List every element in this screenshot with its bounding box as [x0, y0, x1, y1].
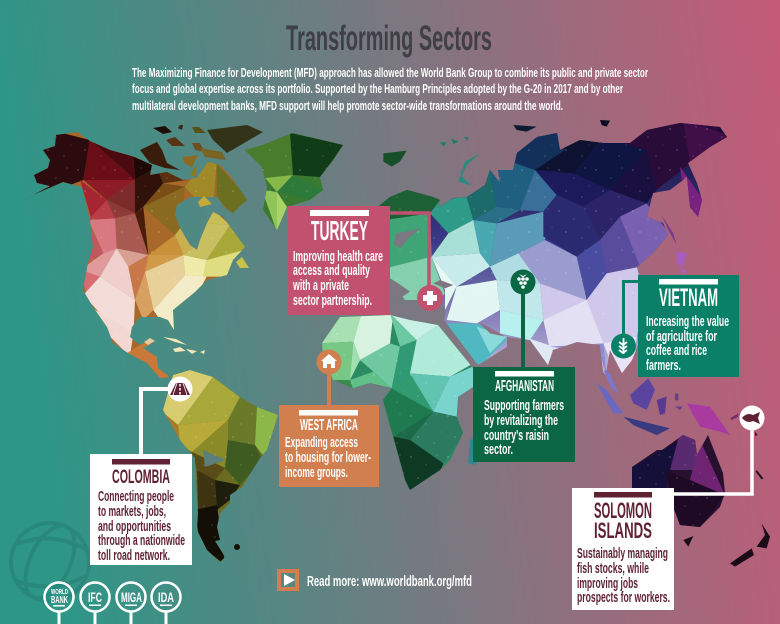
read more link [279, 571, 472, 590]
callout: solomon islands: fish stocks, while [577, 561, 649, 577]
icon: wheat [611, 334, 636, 358]
callout: solomon islands: prospects for workers. [577, 590, 670, 606]
callout: vietnam: of agriculture for [646, 329, 717, 345]
map: northern islands [383, 120, 687, 275]
logo: ida: IDA [158, 589, 174, 605]
logo: world bank [44, 582, 74, 624]
read more link: Read more: www.worldbank.org/mfd [307, 573, 472, 590]
callout: solomon islands: Sustainably managing [577, 546, 668, 562]
map: north america [18, 132, 247, 378]
callout: west africa: to housing for lower- [285, 450, 371, 466]
icon: grapes [510, 270, 536, 294]
callout: colombia: through a nationwide [98, 533, 185, 549]
map: inland seas [390, 228, 505, 337]
map: madagascar [468, 436, 477, 465]
callout: solomon islands [572, 406, 764, 610]
logo: world bank: BANK [51, 595, 68, 606]
callout: colombia: COLOMBIA [112, 466, 170, 488]
world map [10, 120, 770, 567]
logo: ifc: IFC [88, 589, 102, 605]
logo: world bank: WORLD [51, 589, 68, 596]
icon: health cross [417, 285, 443, 311]
callout: afghanistan: country's raisin [484, 428, 549, 444]
callout: turkey [288, 206, 443, 315]
callout: west africa: WEST AFRICA [300, 417, 358, 434]
callout: colombia: to markets, jobs, [98, 504, 166, 520]
callout: colombia: and opportunities [98, 519, 171, 535]
map: greenland [245, 133, 343, 230]
map: australia [632, 435, 725, 527]
icon: play button [279, 571, 297, 589]
logo: miga: MIGA [121, 589, 142, 605]
intro text [132, 66, 648, 113]
intro text: multilateral development banks, MFD support will help promote sector-wide transformations around the world. [132, 99, 563, 113]
callout: turkey: sector partnership. [293, 293, 372, 309]
callout: vietnam [611, 275, 739, 377]
callout: colombia: toll road network. [98, 548, 170, 564]
icon: fish [740, 406, 764, 430]
map: africa [322, 315, 473, 490]
callout: solomon islands: ISLANDS [594, 518, 652, 543]
icon: road [168, 376, 192, 402]
map: south america [160, 365, 280, 565]
callout: colombia: Connecting people [98, 489, 174, 505]
callout: afghanistan: Supporting farmers [484, 398, 564, 414]
callout: solomon islands: SOLOMON [594, 498, 652, 523]
callout: west africa: Expanding access [285, 435, 358, 451]
callout: west africa [279, 350, 379, 487]
map: eurasia [379, 123, 727, 376]
icon: house [316, 350, 342, 374]
map: arctic islands and caribbean [140, 125, 263, 354]
callout: afghanistan [473, 270, 575, 462]
callout: turkey: Improving health care [293, 249, 383, 265]
callout: afghanistan: by revitalizing the [484, 413, 558, 429]
map: falkland island [234, 544, 240, 550]
callout: afghanistan: AFGHANISTAN [495, 378, 554, 395]
title: Transforming Sectors [286, 19, 492, 58]
callout: turkey: with a private [292, 278, 349, 294]
callout: vietnam: VIETNAM [659, 284, 718, 312]
map: southeast asia and pacific islands [597, 370, 770, 567]
callout: afghanistan: sector. [484, 442, 513, 458]
world bank globe watermark [11, 518, 89, 606]
callout: turkey: access and quality [293, 263, 370, 279]
callout: vietnam: coffee and rice [646, 343, 707, 359]
callout: west africa: income groups. [285, 465, 348, 481]
institution logos [44, 582, 180, 624]
callout: turkey: TURKEY [311, 215, 368, 246]
callout: vietnam: farmers. [646, 358, 681, 374]
callout: solomon islands: improving jobs [577, 576, 638, 592]
callout: colombia [90, 376, 192, 565]
